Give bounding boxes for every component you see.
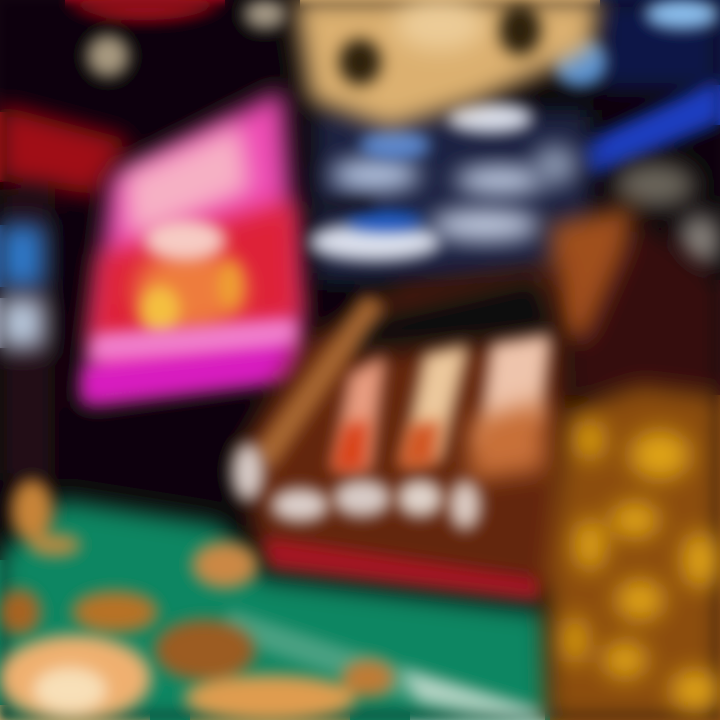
striped blue and white figure	[310, 38, 606, 280]
green table	[0, 500, 552, 720]
pink poster	[84, 90, 302, 402]
gray far right highlight	[680, 214, 720, 266]
scattered cookies	[0, 480, 394, 720]
gray right highlight	[615, 163, 695, 207]
red machine base	[265, 538, 540, 602]
dog face	[295, 0, 600, 128]
gold sack	[548, 385, 720, 720]
slot reels	[332, 335, 550, 480]
bright table line	[400, 670, 545, 720]
left side screen	[0, 190, 55, 480]
maroon machine top right	[570, 225, 720, 400]
white table line	[220, 610, 545, 720]
white marquee blobs	[233, 444, 480, 529]
brown arm	[550, 205, 635, 340]
slot machine	[233, 265, 570, 602]
dark top background with lights	[0, 0, 720, 195]
blue diagonal streak	[570, 80, 720, 175]
